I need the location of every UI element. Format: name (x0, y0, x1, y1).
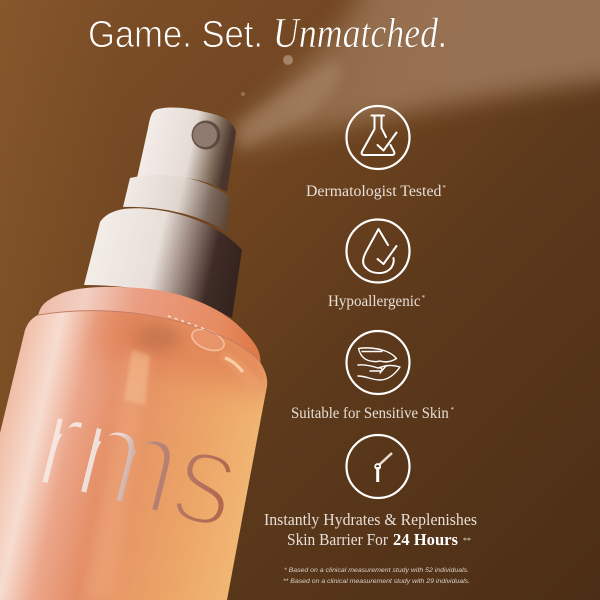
footnotes: ** Based on a clinical measurement study with 29 individuals. (283, 578, 470, 585)
label: hydrates: Instantly Hydrates & Replenishes (264, 510, 477, 529)
label: hypoallergenic: Hypoallergenic (328, 293, 423, 310)
shoulder seam (38, 311, 260, 362)
label: sensitive skin: * (451, 406, 454, 414)
title (88, 11, 448, 57)
bottle body (0, 311, 267, 600)
label: hydrates: 24 Hours (393, 530, 458, 549)
bottle with spray pump (0, 108, 290, 600)
label: dermatologist tested: * (442, 184, 447, 192)
pump nozzle (137, 108, 236, 192)
pump collar (123, 175, 230, 232)
water droplet (189, 325, 243, 372)
badge: dermatologist tested (346, 106, 410, 169)
pump base (84, 208, 242, 318)
title: Game. Set. (88, 14, 263, 56)
label: sensitive skin: Suitable for Sensitive Skin (291, 405, 457, 422)
spray mist (234, 0, 600, 152)
label: dermatologist tested: Dermatologist Tested (306, 183, 439, 200)
footnotes: * Based on a clinical measurement study with 52 individuals. (284, 567, 469, 574)
title: Unmatched (273, 11, 439, 57)
badge: sensitive skin (346, 331, 410, 394)
bottle reflections (85, 312, 268, 596)
footnotes (283, 567, 470, 585)
bottle logo text (42, 418, 230, 523)
title: . (437, 14, 448, 56)
label: hydrates: Skin Barrier For (287, 530, 388, 549)
label: hypoallergenic: * (422, 294, 425, 302)
label: hydrates: ** (463, 536, 471, 545)
badge: hypoallergenic (346, 220, 410, 282)
bottle shoulder (38, 287, 260, 364)
badge: 24 hours clock (346, 435, 410, 498)
label: hydrates (264, 510, 477, 549)
